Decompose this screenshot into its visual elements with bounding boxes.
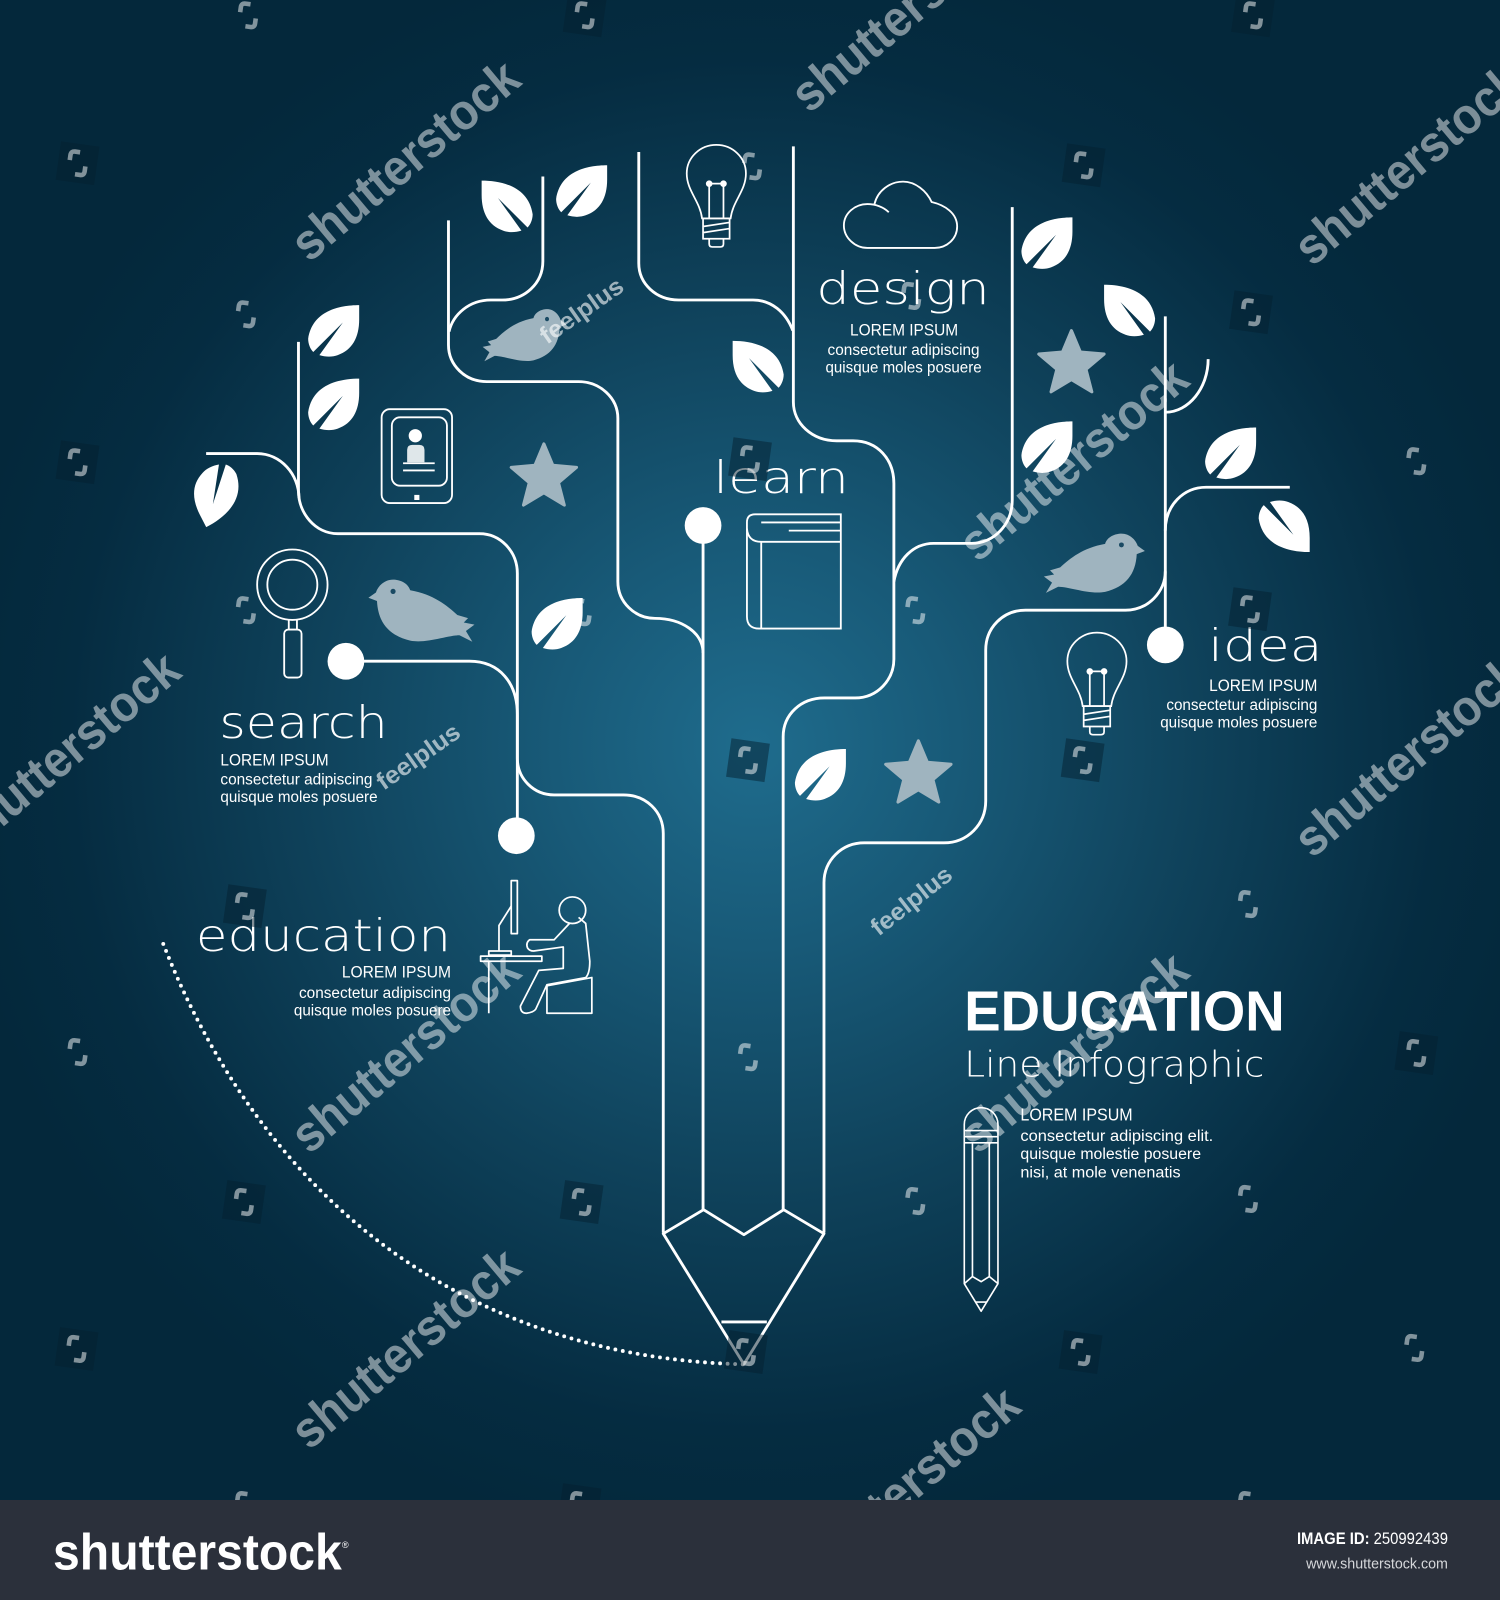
label: education: education	[196, 909, 451, 962]
birds	[368, 309, 1145, 642]
icon: small pencil	[964, 1108, 998, 1311]
top left twig	[449, 177, 543, 332]
watermark: feelplus: feelplus	[866, 861, 958, 941]
label: education: quisque moles posuere	[294, 1002, 451, 1019]
icon: book	[747, 514, 841, 629]
top center twig	[639, 152, 793, 331]
label: search	[219, 696, 388, 806]
label: idea: idea	[1208, 619, 1322, 672]
footer bar	[0, 1500, 1500, 1600]
title block: Line Infographic	[964, 1045, 1264, 1086]
footer logo: shutterstock	[53, 1523, 342, 1580]
label: design: LOREM IPSUM	[850, 321, 958, 340]
label: search: consectetur adipiscing	[220, 772, 372, 789]
label: learn: learn	[713, 451, 849, 504]
label: search: search	[219, 696, 388, 749]
label: design: quisque moles posuere	[826, 359, 982, 376]
label: design: design	[816, 262, 990, 315]
small arc twig	[1165, 359, 1208, 412]
label: idea: LOREM IPSUM	[1209, 676, 1317, 695]
label: search: LOREM IPSUM	[220, 750, 329, 769]
icon: tablet	[382, 409, 452, 503]
watermark: feelplus: feelplus	[372, 719, 466, 796]
label: design	[816, 262, 990, 376]
pencil tree	[206, 146, 1290, 1364]
left twig	[206, 454, 299, 498]
watermark text: shutterstock	[280, 940, 531, 1164]
inner right trunk	[783, 146, 894, 1210]
label: idea: quisque moles posuere	[1160, 715, 1317, 732]
search branch	[346, 661, 517, 714]
title block	[964, 980, 1285, 1182]
watermark text: shutterstock	[280, 48, 531, 272]
label: design: consectetur adipiscing	[828, 342, 980, 359]
label: idea	[1160, 619, 1322, 732]
icon: person at computer	[481, 881, 592, 1013]
icon: light bulb top	[687, 145, 746, 247]
site url: www.shutterstock.com	[1305, 1556, 1448, 1572]
label: education	[196, 909, 451, 1019]
dotted arc	[163, 944, 743, 1364]
watermark text: shutterstock	[780, 1374, 1031, 1598]
label: education: LOREM IPSUM	[342, 963, 451, 982]
inner left stem	[702, 526, 704, 1210]
title block: EDUCATION	[964, 980, 1285, 1043]
title block: consectetur adipiscing elit.	[1020, 1128, 1213, 1145]
title block: LOREM IPSUM	[1020, 1104, 1133, 1124]
outer left trunk	[298, 342, 663, 1233]
icon: light bulb idea	[1067, 633, 1127, 735]
outer right trunk	[824, 571, 1165, 1233]
icon: cloud	[844, 182, 957, 248]
leaves	[183, 165, 1310, 801]
watermark text: shutterstock	[948, 940, 1199, 1164]
stars	[511, 331, 1104, 802]
title block: quisque molestie posuere	[1020, 1146, 1201, 1163]
image id: IMAGE ID: 250992439	[1297, 1530, 1448, 1548]
idea stem	[1164, 316, 1167, 645]
education stem	[516, 714, 519, 836]
icon: magnifier	[257, 549, 328, 678]
watermark: feelplus: feelplus	[535, 273, 629, 350]
right twig	[1165, 487, 1290, 531]
watermark: feelplus	[372, 273, 958, 941]
pencil tip	[663, 1210, 824, 1364]
node dots	[328, 507, 1184, 854]
label: search: quisque moles posuere	[220, 789, 378, 806]
inner left branch	[448, 220, 703, 653]
label: idea: consectetur adipiscing	[1166, 697, 1317, 714]
watermark text: shutterstock	[948, 348, 1199, 572]
registered mark: ®	[342, 1540, 349, 1550]
title block: nisi, at mole venenatis	[1020, 1165, 1181, 1182]
label: education: consectetur adipiscing	[299, 985, 451, 1002]
watermark text: shutterstock	[280, 1236, 531, 1459]
right upper branch	[894, 207, 1012, 582]
